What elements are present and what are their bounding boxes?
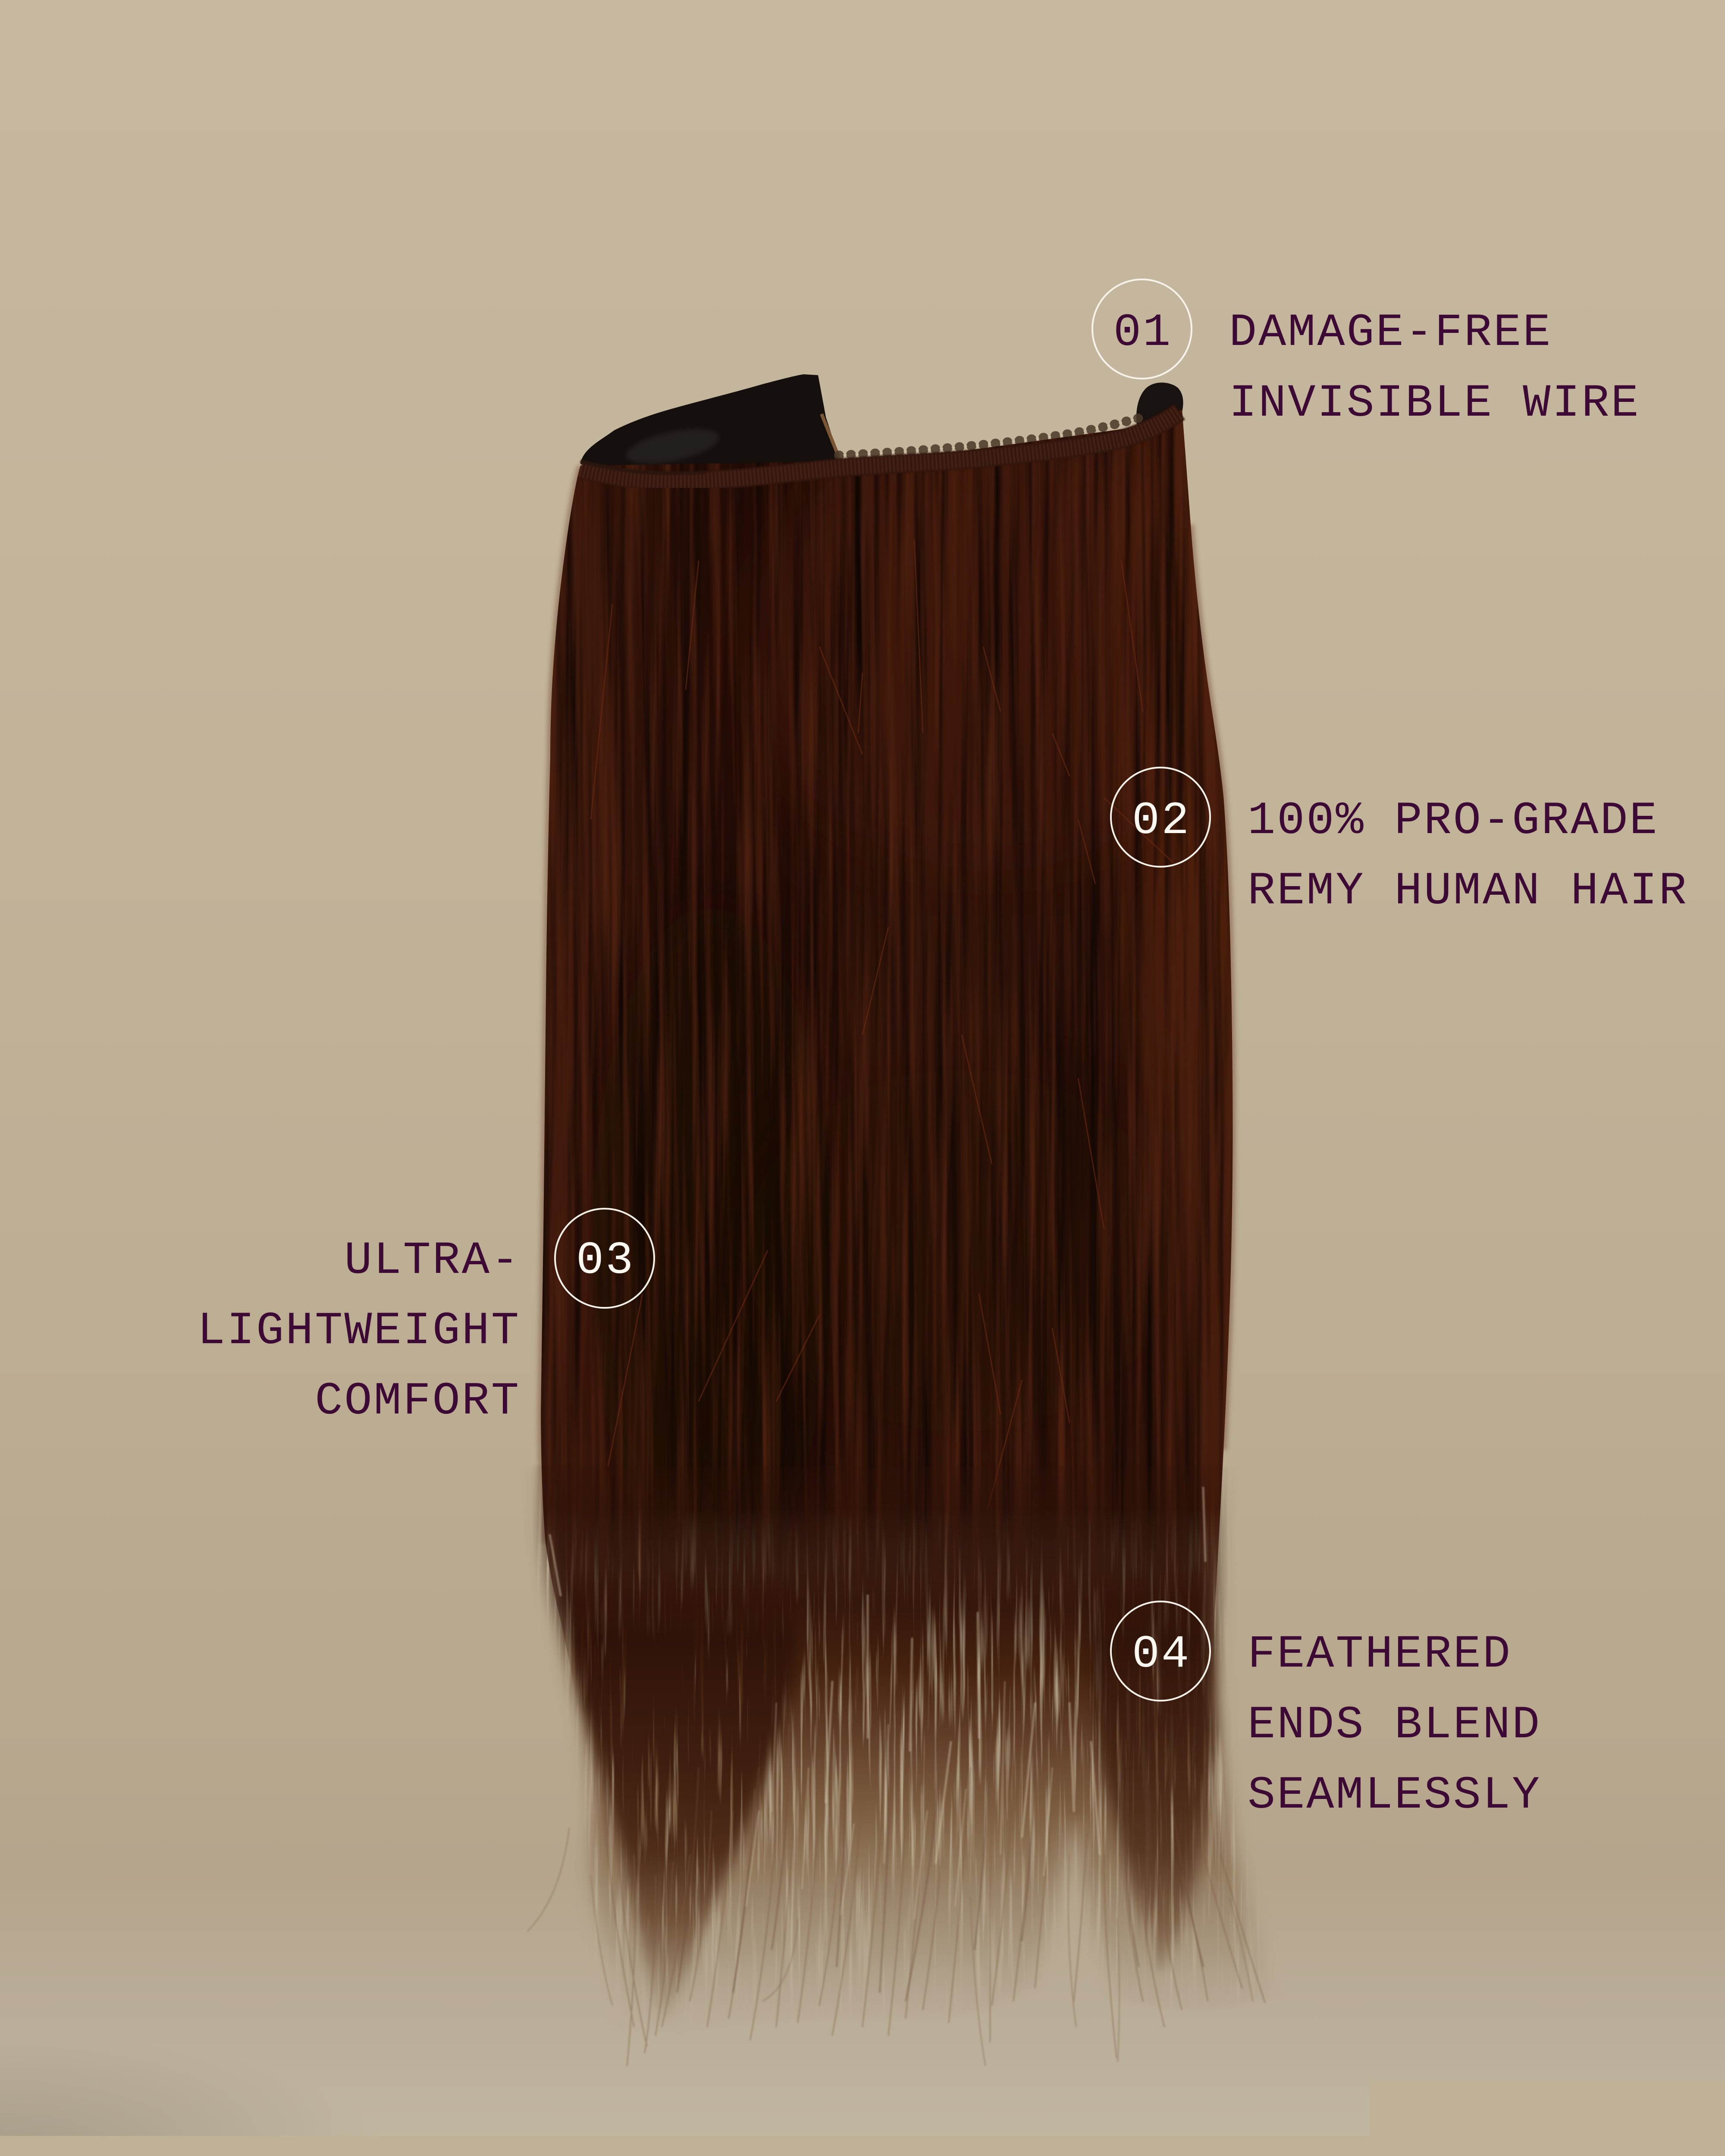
label 03: ULTRA- bbox=[344, 1235, 521, 1287]
marker 01 bbox=[1092, 279, 1192, 379]
marker 02: 02 bbox=[1132, 795, 1191, 847]
label 04: SEAMLESSLY bbox=[1248, 1770, 1541, 1822]
label 03: LIGHTWEIGHT bbox=[198, 1305, 521, 1357]
label 01: DAMAGE-FREE bbox=[1229, 307, 1552, 359]
marker 04: 04 bbox=[1132, 1629, 1191, 1681]
light gaps in the ends bbox=[550, 1488, 1205, 1919]
marker 03: 03 bbox=[576, 1235, 635, 1287]
hair extension bbox=[518, 367, 1267, 2065]
hair body bbox=[518, 367, 1251, 1725]
callout 04: feathered ends blend seamlessly bbox=[1111, 1601, 1541, 1822]
dark lobes bbox=[561, 1574, 1214, 2027]
marker 04 bbox=[1111, 1601, 1210, 1701]
label 02: 100% PRO-GRADE bbox=[1248, 795, 1659, 847]
wire tab bbox=[1136, 382, 1183, 425]
callout 01: damage-free invisible wire bbox=[1092, 279, 1640, 430]
feathered ends bbox=[541, 1466, 1267, 2044]
label 03: COMFORT bbox=[315, 1376, 521, 1428]
label 04: FEATHERED bbox=[1248, 1629, 1512, 1681]
label 02: REMY HUMAN HAIR bbox=[1248, 865, 1688, 918]
label 04: ENDS BLEND bbox=[1248, 1699, 1541, 1752]
label 01: INVISIBLE WIRE bbox=[1229, 378, 1640, 430]
inner weft backing bbox=[580, 374, 841, 479]
callout 03: ultra-lightweight comfort bbox=[198, 1209, 654, 1428]
loose strand tips bbox=[528, 1716, 1265, 2065]
marker 02 bbox=[1111, 768, 1210, 867]
callout 02: pro-grade remy human hair bbox=[1111, 768, 1688, 918]
marker 01: 01 bbox=[1113, 307, 1172, 359]
marker 03 bbox=[555, 1209, 654, 1308]
top stitched band bbox=[580, 412, 1179, 481]
lace edge bbox=[839, 418, 1138, 455]
hair fringe outline bbox=[541, 466, 1233, 1543]
